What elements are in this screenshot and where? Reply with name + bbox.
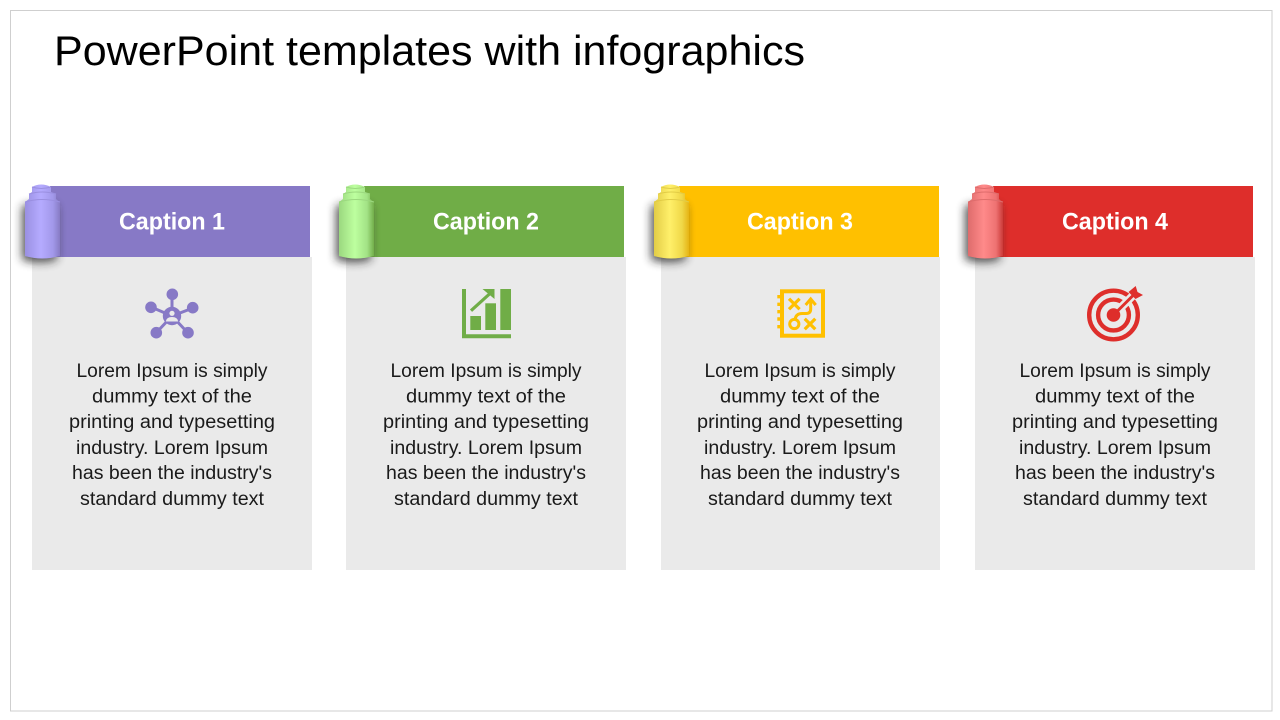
panel: caption 4	[965, 184, 1255, 570]
caption 1 label: Caption 1	[119, 208, 225, 236]
body text 3: industry. Lorem Ipsum	[704, 438, 896, 459]
body text 3: Lorem Ipsum is simply	[704, 361, 896, 382]
body card 3	[661, 257, 940, 570]
body text 4: dummy text of the	[1035, 386, 1195, 408]
panel: caption 2	[336, 184, 626, 570]
body text 3: dummy text of the	[720, 386, 880, 408]
header band 1	[50, 186, 310, 257]
icon: people network	[145, 288, 198, 339]
body text 4: Lorem Ipsum is simply	[1020, 361, 1211, 382]
scroll roll 3	[651, 184, 689, 262]
body text 2: printing and typesetting	[383, 412, 589, 433]
icon: target with arrow	[1089, 286, 1143, 339]
body text 4: industry. Lorem Ipsum	[1019, 438, 1211, 459]
body text 3: has been the industry's	[700, 463, 900, 484]
body text 1: dummy text of the	[92, 386, 252, 408]
body text 2: Lorem Ipsum is simply	[390, 361, 582, 382]
scroll roll 4	[965, 184, 1003, 262]
header band 2	[364, 186, 624, 257]
scroll roll 1	[22, 184, 60, 262]
body text 1: Lorem Ipsum is simply	[76, 361, 268, 382]
body text 4: printing and typesetting	[1012, 412, 1218, 433]
header band 3	[679, 186, 939, 257]
body text 1: has been the industry's	[72, 463, 272, 484]
body card 1	[32, 257, 312, 570]
body text 3: standard dummy text	[708, 489, 893, 510]
body text 3: printing and typesetting	[697, 412, 903, 433]
body text 2: standard dummy text	[394, 489, 579, 510]
body text 2: dummy text of the	[406, 386, 566, 408]
scroll roll 2	[336, 184, 374, 262]
body text 4: has been the industry's	[1015, 463, 1215, 484]
panel: caption 3	[651, 184, 940, 570]
title: PowerPoint templates with infographics	[54, 27, 805, 74]
body card 4	[975, 257, 1255, 570]
caption 2 label: Caption 2	[433, 208, 539, 236]
body text 2: industry. Lorem Ipsum	[390, 438, 582, 459]
icon: strategy notebook	[777, 291, 823, 336]
body text 4	[1012, 361, 1218, 510]
body text 1: industry. Lorem Ipsum	[76, 438, 268, 459]
icon: growth bar chart	[462, 289, 511, 338]
caption 3 label: Caption 3	[747, 208, 853, 236]
body text 2	[383, 361, 589, 510]
body text 1	[69, 361, 275, 510]
body text 2: has been the industry's	[386, 463, 586, 484]
header band 4	[993, 186, 1253, 257]
body text 1: printing and typesetting	[69, 412, 275, 433]
body text 1: standard dummy text	[80, 489, 265, 510]
body card 2	[346, 257, 626, 570]
panel: caption 1	[22, 184, 312, 570]
body text 3	[697, 361, 903, 510]
body text 4: standard dummy text	[1023, 489, 1208, 510]
caption 4 label: Caption 4	[1062, 208, 1169, 236]
